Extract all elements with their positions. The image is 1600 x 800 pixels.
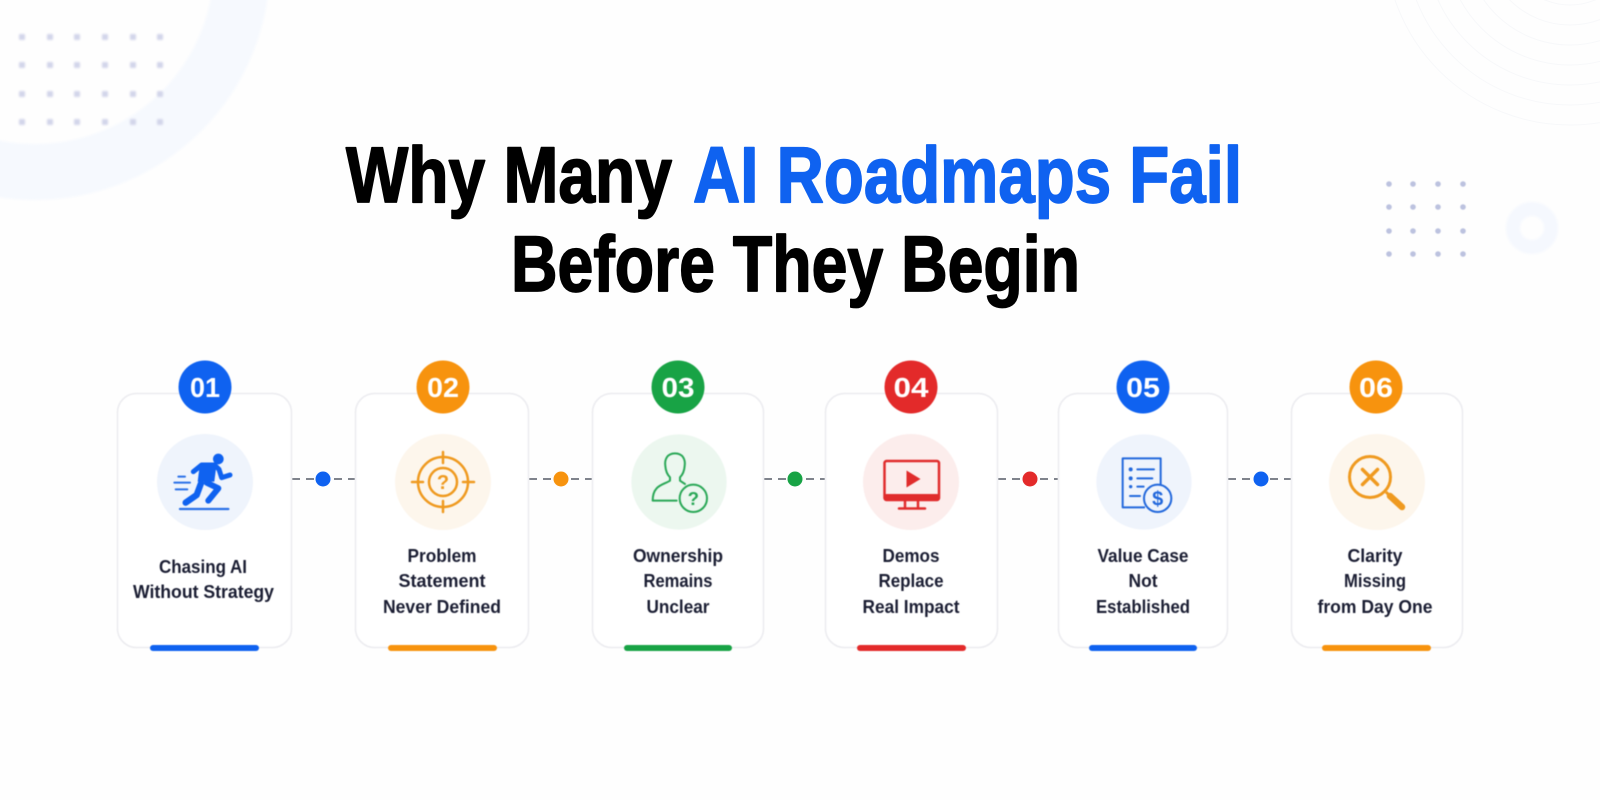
label: card 03: Unclear	[646, 597, 710, 617]
label: card 01: Chasing AI	[159, 557, 247, 577]
label: card 04	[862, 546, 960, 617]
panel: card 06	[1292, 360, 1462, 651]
icon: running person	[157, 434, 253, 530]
label: card 05	[1096, 546, 1190, 617]
icon: person with question mark	[631, 434, 727, 530]
icon: target with question mark	[395, 434, 491, 530]
icon: target with question mark: ?	[437, 472, 449, 494]
badge: 02: 02	[427, 372, 459, 403]
badge: 04	[884, 360, 938, 414]
label: card 06	[1318, 546, 1432, 617]
label: card 02: Never Defined	[383, 597, 501, 617]
bar: card 02	[388, 645, 497, 651]
label: card 04: Real Impact	[862, 597, 960, 617]
label: card 06: from Day One	[1318, 597, 1432, 617]
label: card 06: Missing	[1344, 571, 1406, 591]
panel: card 04	[826, 360, 998, 651]
title: Before They Begin	[511, 219, 1080, 308]
badge: 05	[1116, 360, 1170, 414]
label: card 04: Demos	[882, 546, 940, 566]
panel: card 02	[356, 360, 528, 651]
panel: card 05	[1058, 360, 1228, 651]
label: card 04: Replace	[878, 571, 944, 591]
badge: 05: 05	[1126, 372, 1160, 403]
label: card 05: Not	[1128, 571, 1158, 591]
badge: 06: 06	[1359, 372, 1393, 403]
icon: magnifier with cross	[1329, 434, 1425, 530]
badge: 06	[1350, 360, 1402, 414]
badge: 02	[416, 360, 470, 414]
bar: card 05	[1089, 645, 1197, 651]
connector: 3 to 4	[764, 472, 825, 486]
badge: 01	[178, 360, 232, 414]
panel: card 01	[118, 360, 292, 651]
connector: 1 to 2	[292, 472, 355, 486]
connector: 2 to 3	[529, 472, 592, 486]
label: card 03	[633, 546, 723, 617]
badge: 03	[652, 360, 704, 414]
label: card 02: Problem	[408, 546, 476, 566]
connector: 5 to 6	[1228, 472, 1291, 486]
bar: card 04	[857, 645, 966, 651]
icon: document with dollar coin: $	[1152, 489, 1163, 511]
bar: card 03	[624, 645, 732, 651]
label: card 01	[133, 557, 274, 602]
label: card 06: Clarity	[1348, 546, 1402, 566]
icon: document with dollar coin	[1096, 434, 1192, 530]
icon: person with question mark: ?	[688, 488, 699, 509]
connector: 4 to 5	[998, 472, 1058, 486]
label: card 03: Remains	[644, 571, 712, 591]
label: card 03: Ownership	[633, 546, 723, 566]
label: card 02: Statement	[398, 571, 486, 591]
title: Why Many	[346, 130, 672, 219]
label: card 01: Without Strategy	[133, 582, 274, 602]
title	[346, 130, 1242, 308]
badge: 01: 01	[190, 372, 220, 403]
panel: card 03	[592, 360, 764, 651]
badge: 03: 03	[662, 372, 694, 403]
label: card 05: Established	[1096, 597, 1190, 617]
bar: card 06	[1322, 645, 1431, 651]
title: AI Roadmaps Fail	[693, 130, 1242, 219]
label: card 02	[383, 546, 501, 617]
label: card 05: Value Case	[1098, 546, 1188, 566]
icon: monitor with play button	[863, 434, 959, 530]
bar: card 01	[150, 645, 259, 651]
badge: 04: 04	[894, 372, 929, 403]
